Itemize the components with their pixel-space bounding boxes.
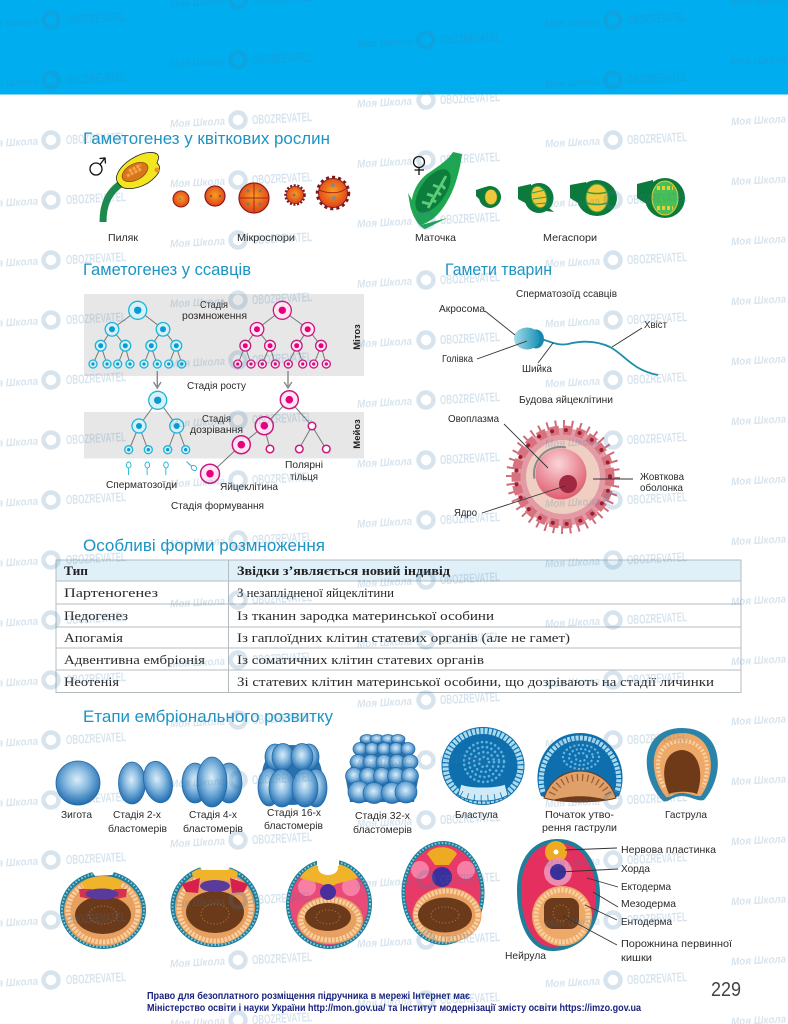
labels: blastula and gastrula: Початок утво-	[545, 809, 615, 821]
panel: cleavage stages	[56, 734, 418, 836]
heading: mammals: Гаметогенез у ссавців	[83, 260, 251, 279]
labels: stages: Стадія	[200, 299, 228, 311]
connector lines	[93, 310, 326, 474]
icon: microspore 1	[173, 191, 189, 207]
label: megaspores: Мегаспори	[543, 232, 597, 244]
icon: 2 blastomeres	[118, 758, 177, 806]
icon: megaspore 3	[570, 180, 617, 216]
meiosis band	[84, 412, 364, 458]
icon: microspore tetrad	[239, 183, 269, 213]
labels: cleavage stages: бластомерів	[353, 824, 412, 836]
icon: yolk membrane	[526, 440, 600, 514]
callout lines: egg	[482, 424, 633, 513]
icon: pistil	[408, 152, 462, 229]
icon: gastrula	[647, 728, 718, 801]
labels: sperm parts: Хвіст	[644, 319, 667, 331]
icon: microspore 2	[205, 186, 225, 206]
labels: egg parts: Жовткова	[640, 471, 684, 483]
labels: neurula parts: Ектодерма	[621, 881, 671, 893]
panel: neurulation stages	[60, 839, 732, 964]
labels: stages: Стадія формування	[171, 500, 264, 512]
labels: egg parts: Ядро	[454, 507, 477, 519]
labels: stages: розмноження	[182, 310, 247, 322]
label: egg title: Будова яйцеклітини	[519, 394, 613, 406]
icon: pollen grain	[318, 178, 348, 208]
table text: Із соматичних клітин статевих органів	[237, 652, 484, 667]
heading: embryonic stages: Етапи ембріонального розвитку	[83, 707, 333, 726]
page number: 229	[711, 979, 741, 1001]
icon: ooplasm	[530, 443, 592, 505]
icon: corona radiata	[512, 426, 614, 528]
icon: neurula stage 3	[286, 856, 372, 949]
arrows: growth stage	[154, 371, 292, 388]
labels: neurula parts	[505, 844, 732, 964]
labels: cleavage stages: Зигота	[61, 809, 92, 821]
table text: Тип	[64, 564, 88, 578]
labels: cleavage stages: бластомерів	[264, 820, 323, 832]
header band	[0, 0, 788, 94]
labels: blastula and gastrula: рення гаструли	[542, 822, 617, 834]
table text: Партеногенез	[64, 585, 158, 600]
labels: stages: тільця	[290, 471, 318, 483]
labels: egg parts	[448, 413, 684, 519]
icon: 32 blastomeres	[346, 734, 418, 804]
footer notice	[147, 990, 641, 1014]
labels: neurula parts: Хорда	[621, 863, 650, 875]
table text: Із гаплоїдних клітин статевих органів (але не гамет)	[237, 630, 570, 645]
icon: 4 blastomeres	[182, 757, 242, 807]
labels: cleavage stages	[61, 807, 412, 836]
labels: neurula parts: кишки	[621, 952, 652, 964]
icon: spiky microspore	[286, 186, 304, 204]
labels: egg parts: Овоплазма	[448, 413, 499, 425]
footer notice: Міністерство освіти і науки України http://mon.gov.ua/ та Інститут модернізації змісту освіти https://imzo.gov.ua	[147, 1003, 641, 1014]
labels: cleavage stages: бластомерів	[108, 823, 167, 835]
table text: Апогамія	[64, 630, 123, 645]
table text: Зі статевих клітин материнської особини, що дозрівають на стадії личинки	[237, 674, 714, 689]
labels: stages: Яйцеклітина	[220, 481, 278, 493]
labels: stages: Стадія росту	[187, 380, 247, 392]
blue mitosis tree	[89, 301, 186, 368]
icon: megaspore 2	[518, 183, 554, 213]
labels: cleavage stages: Стадія 32-х	[355, 810, 411, 822]
icon: female symbol	[414, 156, 424, 175]
panel: egg cell	[448, 394, 684, 528]
labels: neurula parts: Нервова пластинка	[621, 844, 716, 856]
labels: cleavage stages: Стадія 4-х	[189, 809, 238, 821]
table text: Адвентивна ембріонія	[64, 652, 205, 667]
pink meiosis tree	[200, 391, 330, 483]
labels: cleavage stages: бластомерів	[183, 823, 243, 835]
icon: 16 blastomeres	[258, 744, 327, 807]
labels: blastula and gastrula: Бластула	[455, 809, 498, 821]
labels: stages: Стадія	[202, 413, 231, 425]
label: anther: Пиляк	[108, 232, 138, 244]
callout lines: neurula	[559, 848, 618, 945]
label: microspores: Мікроспори	[237, 232, 295, 244]
panel: blastula and gastrula	[442, 727, 718, 834]
labels: blastula and gastrula	[455, 809, 707, 834]
table header background	[56, 560, 741, 581]
labels: blastula and gastrula: Гаструла	[665, 809, 707, 821]
labels: sperm parts: Акросома	[439, 303, 485, 315]
labels: neurula parts: Нейрула	[505, 950, 546, 962]
table text: З незаплідненої яйцеклітини	[237, 585, 394, 600]
table: reproduction forms	[56, 560, 741, 692]
table text	[64, 564, 714, 689]
panel: male gametogenesis in plants	[90, 152, 348, 244]
labels: stages: дозрівання	[190, 424, 243, 436]
labels: sperm parts: Голівка	[442, 353, 473, 365]
icon: early gastrula	[537, 733, 623, 802]
table text: Із тканин зародка материнської особини	[237, 608, 494, 623]
icon: neurula stage 2	[170, 864, 260, 947]
icon: neurula stage 1	[60, 869, 146, 949]
labels: neurula parts: Ентодерма	[621, 916, 672, 928]
icon: neurula stage 5	[517, 839, 600, 951]
label: spermatozoon title: Сперматозоїд ссавців	[516, 288, 617, 300]
icon: nucleus	[559, 475, 577, 493]
callout lines: sperm	[477, 311, 642, 363]
icons: spermatozoa	[126, 462, 198, 475]
heading: flowering plants: Гаметогенез у квіткових рослин	[83, 129, 330, 148]
label: mitosis: Мітоз	[352, 324, 363, 350]
footer notice: Право для безоплатного розміщення підручника в мережі Інтернет має	[147, 990, 470, 1002]
labels: sperm parts: Шийка	[522, 363, 552, 375]
mitosis band	[84, 294, 364, 376]
labels: stages: Сперматозоїди	[106, 479, 177, 491]
label: meiosis: Мейоз	[352, 419, 363, 449]
labels: neurula parts: Мезодерма	[621, 898, 676, 910]
panel: spermatozoon	[439, 288, 667, 375]
icon: sperm tail	[541, 339, 658, 375]
icon: male symbol	[90, 158, 106, 175]
blue meiosis tree	[125, 391, 190, 454]
pink mitosis tree	[234, 301, 330, 368]
icon: megaspore 4	[637, 178, 685, 218]
icon: megaspore 1	[476, 186, 501, 208]
icon: neurula stage 4	[402, 841, 484, 945]
heading: animal gametes: Гамети тварин	[445, 260, 552, 279]
labels: cleavage stages: Стадія 2-х	[113, 809, 162, 821]
panel: female gametogenesis in plants	[408, 152, 685, 244]
labels: sperm parts	[439, 303, 667, 375]
table grid	[56, 560, 741, 692]
panel: mammal gametogenesis diagram	[84, 294, 364, 512]
labels: stages: Полярні	[285, 459, 323, 471]
labels: neurula parts: Порожнина первинної	[621, 938, 732, 950]
table text: Педогенез	[64, 608, 128, 623]
heading: special reproduction: Особливі форми розмноження	[83, 536, 325, 555]
icon: anther	[103, 152, 160, 222]
table text: Звідки з’являється новий індивід	[237, 564, 451, 578]
table text: Неотенія	[64, 674, 119, 689]
labels: cleavage stages: Стадія 16-х	[267, 807, 322, 819]
labels: stages	[106, 299, 323, 512]
icon: sperm head	[514, 328, 544, 350]
icon: blastula	[442, 727, 524, 805]
labels: egg parts: оболонка	[640, 482, 683, 494]
label: pistil: Маточка	[415, 232, 456, 244]
icon: zygote	[56, 761, 100, 805]
